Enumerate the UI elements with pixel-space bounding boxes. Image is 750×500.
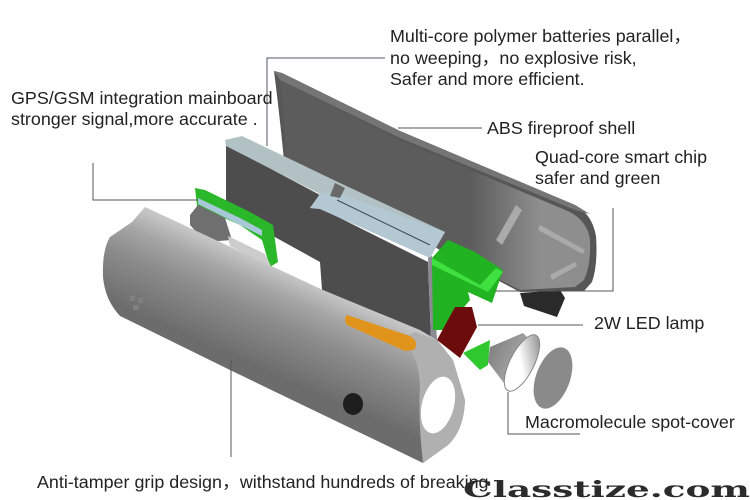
back shell (274, 71, 596, 292)
text: batteries: no weeping，no explosive risk, (390, 48, 637, 68)
text: shell: ABS fireproof shell (487, 118, 635, 138)
green circuit board left (190, 188, 278, 268)
text: chip: Quad-core smart chip (535, 147, 707, 167)
front shell (103, 207, 465, 463)
text: mainboard: GPS/GSM integration mainboard (11, 88, 273, 108)
text: grip: Anti-tamper grip design，withstand hundreds of breaking (37, 472, 488, 492)
text: batteries: Safer and more efficient. (390, 69, 585, 89)
leader line: batteries (267, 58, 385, 146)
spot cover (526, 342, 580, 414)
logo mark (130, 296, 143, 310)
leader line: chip (495, 208, 613, 291)
text: LED: 2W LED lamp (594, 313, 704, 333)
power button (343, 393, 363, 415)
red LED lamp (437, 307, 477, 358)
text: batteries: Multi-core polymer batteries parallel， (390, 26, 691, 46)
text: cover: Macromolecule spot-cover (525, 412, 735, 432)
leader line: mainboard (93, 163, 198, 200)
green circuit board right (432, 240, 503, 370)
battery (225, 136, 445, 340)
text: mainboard: stronger signal,more accurate . (11, 109, 258, 129)
leader line: cover (508, 392, 580, 434)
flashlight opening (415, 373, 461, 437)
leader line: grip (230, 360, 232, 457)
reflector cup (488, 330, 547, 396)
connector (520, 290, 565, 317)
text: chip: safer and green (535, 168, 660, 188)
orange indicator (345, 315, 416, 351)
leader line: LED (478, 324, 583, 326)
leader line: shell (398, 127, 482, 129)
